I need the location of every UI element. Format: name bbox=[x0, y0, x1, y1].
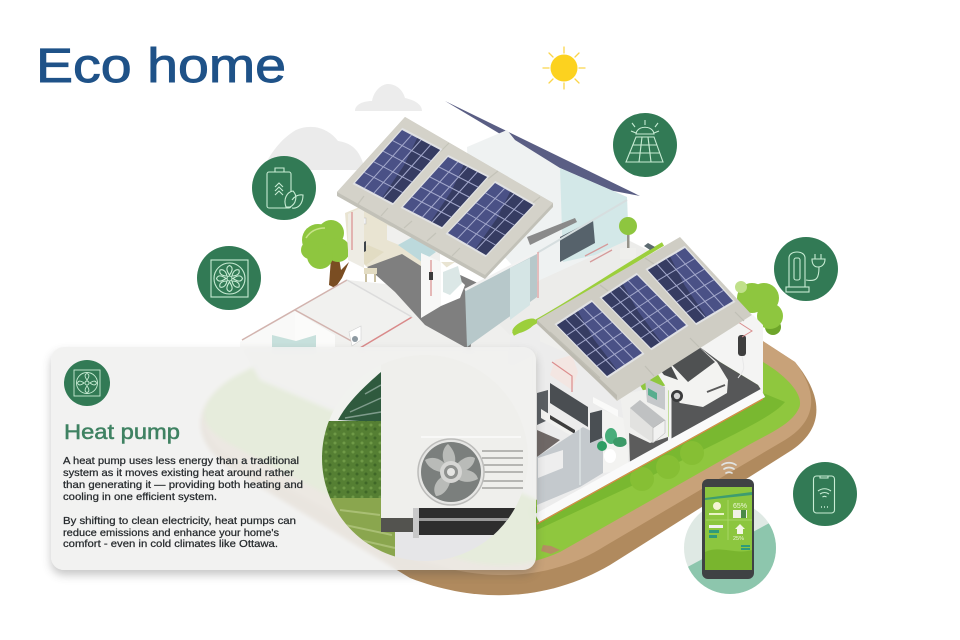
text block: heat pump intro: system as it moves existing heat around rather bbox=[63, 468, 295, 479]
icon: EV charger bbox=[774, 237, 838, 301]
solar panel: lower 1 bbox=[554, 300, 645, 378]
text block: heat pump benefits: By shifting to clean electricity, heat pumps can bbox=[63, 516, 296, 527]
upper house: terrace floor bbox=[490, 240, 652, 335]
smartphone circle backdrop bbox=[684, 509, 776, 594]
cloud: top bbox=[355, 84, 422, 111]
battery storage unit bbox=[630, 400, 665, 443]
icon: heat pump fan small bbox=[64, 360, 110, 406]
lower wing: interior bbox=[537, 340, 670, 517]
upper house: wall columns bbox=[348, 206, 465, 318]
text block: heat pump benefits: reduce emissions and enhance your home's bbox=[63, 528, 279, 539]
washing machine bbox=[349, 326, 361, 346]
sun bbox=[543, 47, 585, 89]
heading: heat pump: Heat pump bbox=[64, 421, 180, 444]
wall battery cabinet bbox=[645, 378, 665, 410]
panel: heat pump card bbox=[51, 347, 536, 570]
tree: right bbox=[735, 281, 783, 335]
illustration: eco home isometric scene bbox=[40, 46, 857, 596]
upper house: back windows bbox=[560, 220, 595, 262]
electric car bbox=[655, 345, 728, 407]
solar panel: upper 3 bbox=[445, 181, 536, 257]
lower solar roof bbox=[537, 237, 752, 401]
stepping stones bbox=[541, 545, 560, 554]
planter strip bbox=[510, 244, 663, 365]
upper house: eave line bbox=[537, 200, 627, 253]
houseplant bbox=[597, 428, 627, 463]
solar panel: lower 3 bbox=[645, 246, 736, 325]
icon: heat pump fan bbox=[197, 246, 261, 310]
left wing: rooms bbox=[240, 280, 412, 350]
smartphone: 65% bbox=[733, 503, 747, 510]
piping: terrace bbox=[585, 244, 612, 262]
solar panel: upper 2 bbox=[400, 155, 490, 229]
cloud: left bbox=[262, 127, 365, 170]
text block: heat pump intro: cooling in one efficient system. bbox=[63, 492, 217, 503]
upper house: hallway ledge bbox=[527, 218, 577, 245]
text block: heat pump intro bbox=[63, 456, 303, 503]
solar panel: upper 1 bbox=[352, 128, 443, 205]
icon: solar panel with sun bbox=[613, 113, 677, 177]
icon: smartphone with wifi bbox=[793, 462, 857, 526]
upper house: glass wing bbox=[465, 252, 538, 347]
ground floor slab bbox=[240, 250, 700, 500]
left wing: wall lines bbox=[242, 280, 412, 348]
tree: left bbox=[301, 220, 350, 288]
title: Eco home bbox=[36, 40, 286, 93]
tree: small patio bbox=[619, 217, 637, 259]
upper house: bedroom bbox=[345, 206, 455, 282]
text block: heat pump benefits: comfort - even in cold climates like Ottawa. bbox=[63, 539, 278, 550]
EV charger bbox=[735, 320, 752, 378]
ground bushes bbox=[630, 441, 704, 491]
indoor aircon bbox=[593, 397, 618, 417]
photo: outdoor heat pump unit bbox=[322, 372, 523, 560]
smartphone bbox=[702, 479, 754, 579]
smartphone: 25% bbox=[733, 536, 744, 542]
upper house: glass wall bbox=[560, 168, 628, 262]
upper solar roof bbox=[337, 117, 553, 279]
text block: heat pump intro: than generating it — providing both heating and bbox=[63, 480, 303, 491]
garage: floor and walls bbox=[537, 315, 763, 524]
upper house: floor bbox=[367, 245, 482, 350]
text block: heat pump benefits bbox=[63, 516, 296, 550]
far solar roof bbox=[445, 101, 640, 196]
icon: battery with leaf bbox=[252, 156, 316, 220]
island base bbox=[200, 290, 816, 595]
upper house: back wall bbox=[467, 130, 628, 295]
text block: heat pump intro: A heat pump uses less energy than a traditional bbox=[63, 456, 299, 467]
wifi signal bbox=[722, 463, 736, 473]
solar panel: lower 2 bbox=[599, 273, 689, 350]
bird bbox=[644, 243, 655, 250]
panel content: heat pump bbox=[62, 360, 523, 560]
